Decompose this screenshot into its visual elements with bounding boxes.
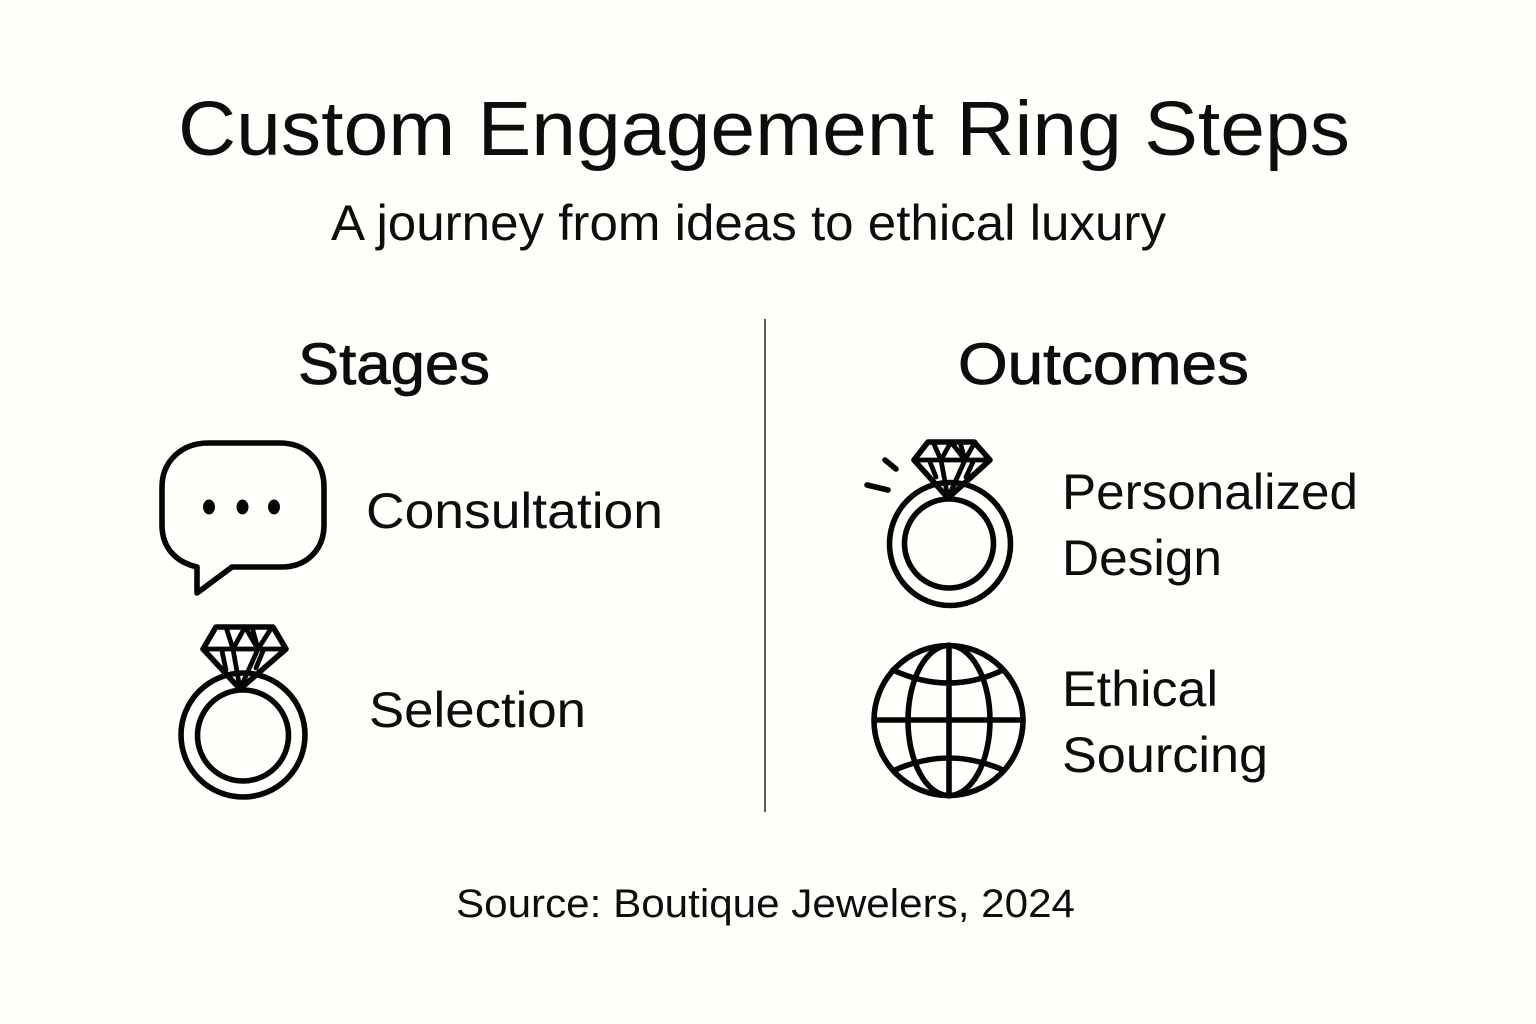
icon: speech bubble — [162, 443, 324, 593]
label: ethical sourcing: Sourcing — [1062, 727, 1268, 783]
source note: Source: Boutique Jewelers, 2024 — [456, 882, 1075, 926]
label: selection: Selection — [369, 682, 586, 738]
label: personalized design: Personalized — [1062, 464, 1358, 520]
label: ethical sourcing — [1062, 661, 1268, 783]
label: personalized design — [1062, 464, 1358, 586]
label: personalized design: Design — [1062, 530, 1222, 586]
label: consultation: Consultation — [366, 483, 663, 539]
title: Custom Engagement Ring Steps — [178, 86, 1350, 172]
icon: sparkling diamond ring — [867, 442, 1010, 606]
subtitle: A journey from ideas to ethical luxury — [331, 195, 1166, 251]
panel: outcomes — [867, 332, 1358, 796]
label: ethical sourcing: Ethical — [1062, 661, 1218, 717]
heading: stages: Stages — [298, 332, 490, 397]
heading: outcomes: Outcomes — [958, 332, 1249, 397]
panel: stages — [162, 332, 663, 797]
icon: diamond ring — [181, 627, 305, 797]
icon: globe — [874, 645, 1023, 796]
